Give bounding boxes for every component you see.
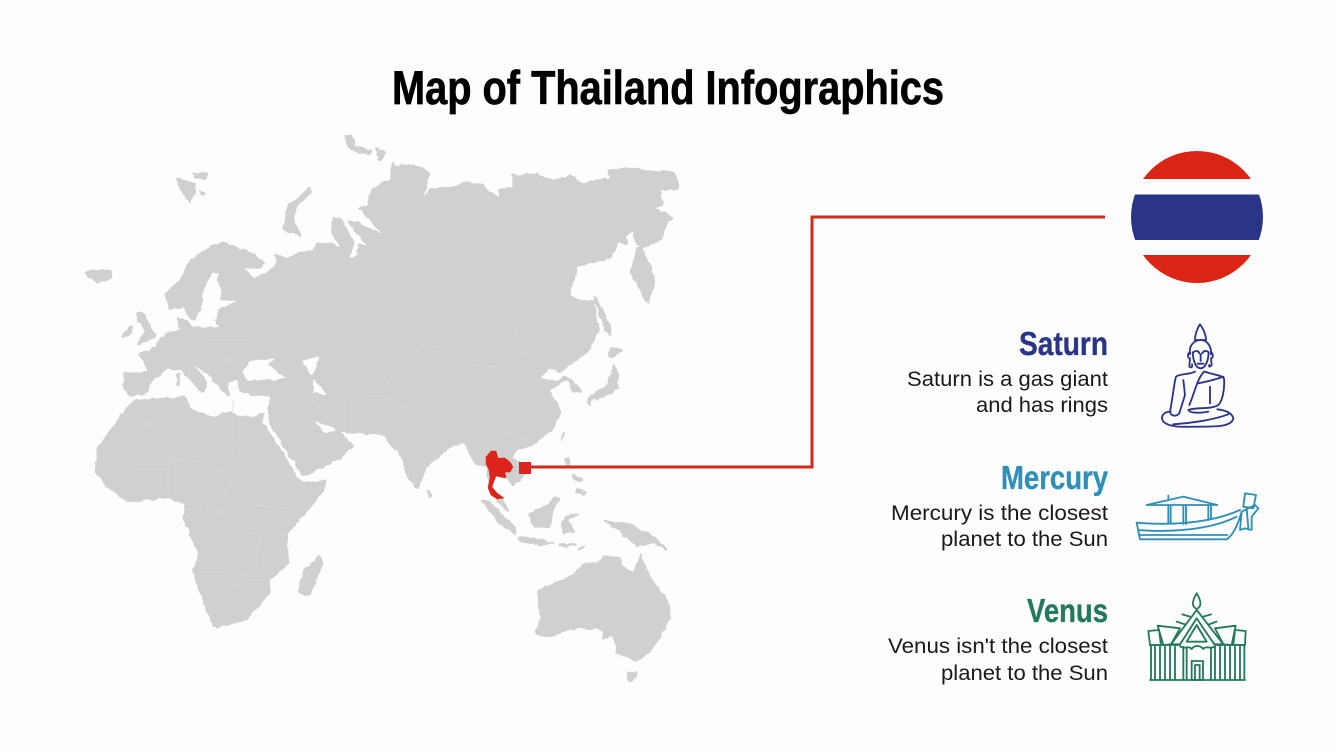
Thailand highlighted — [486, 451, 513, 499]
icon: Thailand flag — [1131, 151, 1263, 283]
text block: Mercury: Mercury — [1001, 459, 1109, 496]
text block: Mercury — [891, 459, 1109, 551]
text block: Mercury: planet to the Sun — [941, 527, 1108, 551]
connector line — [528, 217, 1105, 467]
connector marker — [519, 462, 531, 474]
text block: Venus: Venus — [1027, 592, 1108, 629]
Africa — [95, 397, 327, 628]
text block: Mercury: Mercury is the closest — [891, 501, 1108, 525]
icon: temple — [1148, 593, 1246, 680]
text block: Saturn: Saturn — [1019, 325, 1108, 362]
world map — [85, 134, 680, 683]
country borders — [122, 333, 533, 595]
text block: Saturn — [907, 325, 1108, 417]
text block: Venus — [888, 592, 1108, 685]
icon: Buddha — [1162, 324, 1233, 427]
text block: Venus: Venus isn't the closest — [888, 634, 1108, 658]
text block: Venus: planet to the Sun — [941, 661, 1108, 685]
text block: Saturn: Saturn is a gas giant — [907, 367, 1108, 391]
title: Map of Thailand Infographics — [392, 61, 944, 114]
text block: Saturn: and has rings — [976, 393, 1108, 417]
icon: long-tail boat — [1137, 493, 1258, 539]
